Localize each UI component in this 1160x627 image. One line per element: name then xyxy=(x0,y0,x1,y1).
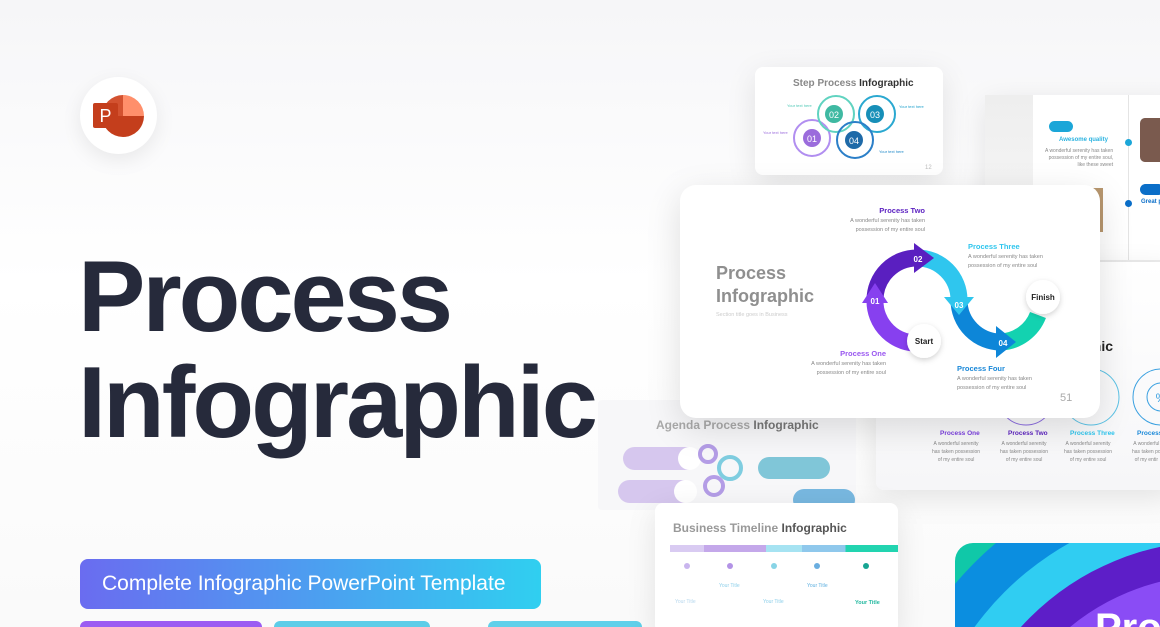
card: step process infographic: 03 xyxy=(870,110,880,120)
card: step process infographic: 01 xyxy=(807,134,817,144)
main slide: process infographic: Section title goes in Business xyxy=(716,312,788,318)
label: process three xyxy=(968,242,1043,269)
card: step process infographic: Step Process Infographic xyxy=(793,78,914,89)
label: process three: A wonderful serenity has taken xyxy=(968,254,1043,260)
card: process circles right: Process Two xyxy=(1008,430,1048,437)
card: process circles right: has taken possession xyxy=(1064,449,1112,455)
card: step process infographic: Your text here xyxy=(787,103,813,108)
card: process circles right: has taken po xyxy=(1132,449,1160,455)
card: business timeline: Your Title xyxy=(763,599,784,605)
chart: S-curve process arrows: 01 xyxy=(871,297,880,306)
label: process one: possession of my entire soul xyxy=(817,370,886,376)
label: process four: Process Four xyxy=(957,364,1005,373)
card: process circles right: has taken possession xyxy=(932,449,980,455)
label: process two xyxy=(850,206,925,233)
card: agenda process: Agenda Process Infographic xyxy=(656,418,819,432)
card: timeline right: Awesome quality xyxy=(1059,137,1108,143)
label: process three: Process Three xyxy=(968,242,1020,251)
card: step process infographic: 12 xyxy=(925,165,932,171)
label: process four xyxy=(957,364,1032,391)
card: process circles right: A wonderful serenity xyxy=(934,441,979,447)
main slide: process infographic xyxy=(680,185,1100,418)
label: process two: A wonderful serenity has taken xyxy=(850,218,925,224)
slide heading: Process xyxy=(716,263,786,283)
card: step process infographic: Your text here xyxy=(763,130,789,135)
label: process one: A wonderful serenity has taken xyxy=(811,361,886,367)
card: process circles right: has taken possession xyxy=(1000,449,1048,455)
card: agenda process xyxy=(598,400,856,510)
button: complete template xyxy=(80,559,541,609)
label: process one xyxy=(811,349,886,376)
card: business timeline: Your Title xyxy=(675,599,696,605)
card: process circles right: Process One xyxy=(940,430,980,437)
card: step process infographic: Your text here xyxy=(879,149,905,154)
card: timeline right: A wonderful serenity has taken xyxy=(1045,148,1113,154)
label: process two: possession of my entire soul xyxy=(856,227,925,233)
card: timeline right: possession of my entire soul, xyxy=(1049,155,1113,161)
label: process three: possession of my entire soul xyxy=(968,263,1037,269)
label: process four: A wonderful serenity has taken xyxy=(957,376,1032,382)
card: process circles right: A wonderful xyxy=(1133,441,1159,447)
title: Infographic xyxy=(78,347,595,459)
label: process four: possession of my entire soul xyxy=(957,385,1026,391)
button: complete template: Complete Infographic PowerPoint Template xyxy=(102,572,506,595)
slide heading xyxy=(716,263,814,306)
title: Process xyxy=(78,241,450,353)
card: step process infographic: Your text here xyxy=(899,104,925,109)
card: process circles right: of my entire soul xyxy=(938,457,974,463)
card: process circles right: A wonderful serenity xyxy=(1066,441,1111,447)
icon: powerpoint logo xyxy=(80,77,157,154)
chart: S-curve process arrows: Finish xyxy=(1031,293,1055,302)
bottom buttons xyxy=(80,621,642,627)
card: timeline right: like these sweet xyxy=(1078,162,1113,168)
slide heading: Infographic xyxy=(716,286,814,306)
card: process circles right: A wonderful serenity xyxy=(1002,441,1047,447)
card: business timeline: Your Title xyxy=(855,600,880,606)
label: process two: Process Two xyxy=(879,206,925,215)
card: process circles right: of my entire soul xyxy=(1070,457,1106,463)
title xyxy=(78,241,595,459)
card: business timeline: Business Timeline Infographic xyxy=(673,521,847,535)
card: process circles right: of my entire soul xyxy=(1006,457,1042,463)
card: step process infographic: 02 xyxy=(829,110,839,120)
card: step process infographic xyxy=(755,67,943,175)
card: process circles right xyxy=(876,262,1160,490)
card: process circles right: of my entir xyxy=(1135,457,1158,463)
chart: S-curve process arrows: 03 xyxy=(955,301,964,310)
chart: S-curve process arrows: 04 xyxy=(999,339,1008,348)
icon: powerpoint logo: P xyxy=(99,106,112,126)
card: timeline right xyxy=(985,95,1160,260)
label: process one: Process One xyxy=(840,349,886,358)
card: process circles right: raphic xyxy=(1071,338,1113,354)
card: business timeline: Your Title xyxy=(719,583,740,589)
card: gradient cover xyxy=(955,543,1160,627)
card: process circles right: Process Three xyxy=(1070,430,1115,437)
card: step process infographic: 04 xyxy=(849,136,859,146)
chart: S-curve process arrows xyxy=(862,243,1062,362)
chart: S-curve process arrows: Start xyxy=(915,337,933,346)
card: business timeline xyxy=(655,503,898,627)
chart: S-curve process arrows: 02 xyxy=(914,255,923,264)
main slide: process infographic: 51 xyxy=(1060,392,1072,404)
card: business timeline: Your Title xyxy=(807,583,828,589)
